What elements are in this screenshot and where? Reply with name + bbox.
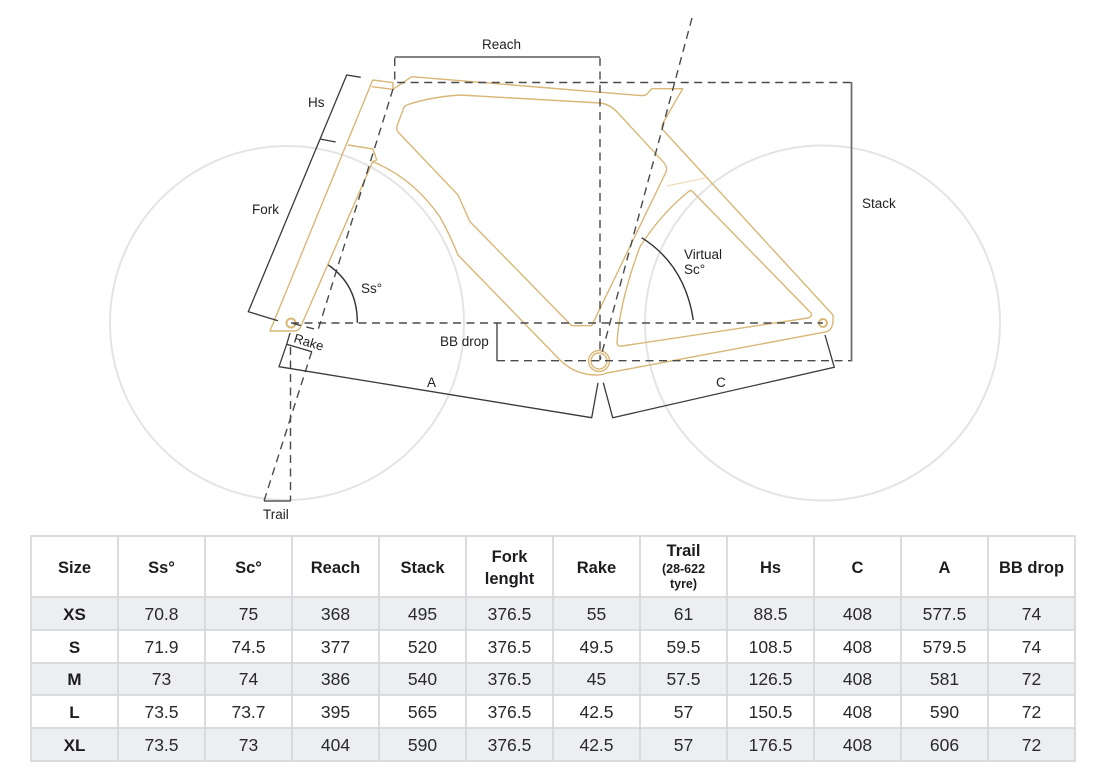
row S: 74.5 xyxy=(231,637,266,657)
row M: 57.5 xyxy=(666,669,701,689)
front wheel xyxy=(110,146,464,500)
rear dropout xyxy=(819,319,827,327)
trail baseline xyxy=(264,500,290,502)
C bracket xyxy=(603,335,834,418)
row XS: 75 xyxy=(239,604,258,624)
row XS: 408 xyxy=(843,604,872,624)
head angle arc xyxy=(328,265,357,323)
row S: 49.5 xyxy=(579,637,614,657)
bottom bracket xyxy=(588,350,610,372)
diagram labels: Hs xyxy=(308,95,325,110)
header row: A xyxy=(939,559,951,577)
row L: 57 xyxy=(674,702,693,722)
row XL: 73 xyxy=(239,735,258,755)
row XS: 74 xyxy=(1022,604,1041,624)
rear wheel xyxy=(645,146,1000,500)
header row: Rake xyxy=(577,559,616,577)
row M: 45 xyxy=(587,669,606,689)
row XL: 176.5 xyxy=(749,735,792,755)
row S: 376.5 xyxy=(488,637,531,657)
row M: 376.5 xyxy=(488,669,531,689)
front axle xyxy=(286,318,296,328)
diagram labels: Virtual xyxy=(684,247,722,262)
row L: L xyxy=(69,703,80,722)
row M: M xyxy=(67,670,82,689)
header row: tyre) xyxy=(670,577,697,591)
row XL: 376.5 xyxy=(488,735,531,755)
header row: Reach xyxy=(311,559,360,577)
diagram labels: BB drop xyxy=(440,334,489,349)
row XS xyxy=(63,604,1041,624)
BB drop bracket xyxy=(496,323,498,361)
row S xyxy=(69,637,1041,657)
row L: 42.5 xyxy=(579,702,614,722)
header row: (28-622 xyxy=(662,562,705,576)
row XS: 70.8 xyxy=(144,604,179,624)
row XS: 577.5 xyxy=(923,604,966,624)
row L: 590 xyxy=(930,702,959,722)
row XS: 495 xyxy=(408,604,437,624)
diagram labels: Ss° xyxy=(361,281,382,296)
row M: 72 xyxy=(1022,669,1041,689)
header row: BB drop xyxy=(999,559,1064,577)
row L: 376.5 xyxy=(488,702,531,722)
reach bracket xyxy=(395,56,600,58)
diagram labels: C xyxy=(716,375,726,390)
rake bracket xyxy=(287,333,312,352)
header row: Fork xyxy=(492,548,528,566)
header row: Size xyxy=(58,559,91,577)
row M: 386 xyxy=(321,669,350,689)
row XL: 408 xyxy=(843,735,872,755)
header row: lenght xyxy=(485,570,535,588)
diagram labels: Trail xyxy=(263,507,289,522)
row S: 74 xyxy=(1022,637,1041,657)
row XS: 61 xyxy=(674,604,693,624)
header row: Stack xyxy=(400,559,445,577)
row L: 73.5 xyxy=(144,702,179,722)
row M: 540 xyxy=(408,669,437,689)
row M: 73 xyxy=(152,669,171,689)
header row: Sc° xyxy=(235,559,262,577)
row L: 73.7 xyxy=(231,702,266,722)
row M: 126.5 xyxy=(749,669,792,689)
row M: 408 xyxy=(843,669,872,689)
shaded rows xyxy=(31,597,1075,761)
row S: 59.5 xyxy=(666,637,701,657)
row L: 150.5 xyxy=(749,702,792,722)
header row: Trail xyxy=(667,542,700,560)
row XS: 376.5 xyxy=(488,604,531,624)
row XL: 606 xyxy=(930,735,959,755)
row M xyxy=(67,669,1041,689)
row XL: 590 xyxy=(408,735,437,755)
dashed reference lines xyxy=(264,18,851,501)
row S: 108.5 xyxy=(749,637,792,657)
row S: 71.9 xyxy=(144,637,179,657)
diagram labels: Stack xyxy=(862,196,896,211)
geometry table xyxy=(31,536,1075,761)
table grid xyxy=(31,536,1075,761)
row XS: XS xyxy=(63,605,86,624)
row XL: 42.5 xyxy=(579,735,614,755)
header row: Ss° xyxy=(148,559,175,577)
row XL: 72 xyxy=(1022,735,1041,755)
diagram labels: Fork xyxy=(252,202,279,217)
row S: 377 xyxy=(321,637,350,657)
row XL: 404 xyxy=(321,735,350,755)
row XS: 368 xyxy=(321,604,350,624)
row S: 408 xyxy=(843,637,872,657)
row XL: XL xyxy=(64,736,85,755)
stack line xyxy=(850,82,852,362)
row XL: 73.5 xyxy=(144,735,179,755)
head tube and fork bracket xyxy=(248,75,361,321)
row L: 395 xyxy=(321,702,350,722)
A bracket xyxy=(279,344,598,418)
row XL xyxy=(64,735,1041,755)
diagram labels: Rake xyxy=(292,331,326,354)
header row: C xyxy=(852,559,864,577)
row M: 74 xyxy=(239,669,258,689)
header row: Hs xyxy=(760,559,781,577)
row L: 72 xyxy=(1022,702,1041,722)
row L xyxy=(69,702,1041,722)
diagram labels xyxy=(252,37,896,522)
diagram labels: Sc° xyxy=(684,262,705,277)
frame geometry diagram xyxy=(110,18,1000,522)
row XS: 88.5 xyxy=(753,604,788,624)
row M: 581 xyxy=(930,669,959,689)
row S: 579.5 xyxy=(923,637,966,657)
row S: 520 xyxy=(408,637,437,657)
row L: 408 xyxy=(843,702,872,722)
seat angle arc xyxy=(642,238,693,320)
diagram labels: A xyxy=(427,375,436,390)
row XL: 57 xyxy=(674,735,693,755)
row XS: 55 xyxy=(587,604,606,624)
row S: S xyxy=(69,638,80,657)
bike frame outline xyxy=(270,77,833,375)
header row xyxy=(58,542,1064,591)
diagram labels: Reach xyxy=(482,37,521,52)
row L: 565 xyxy=(408,702,437,722)
